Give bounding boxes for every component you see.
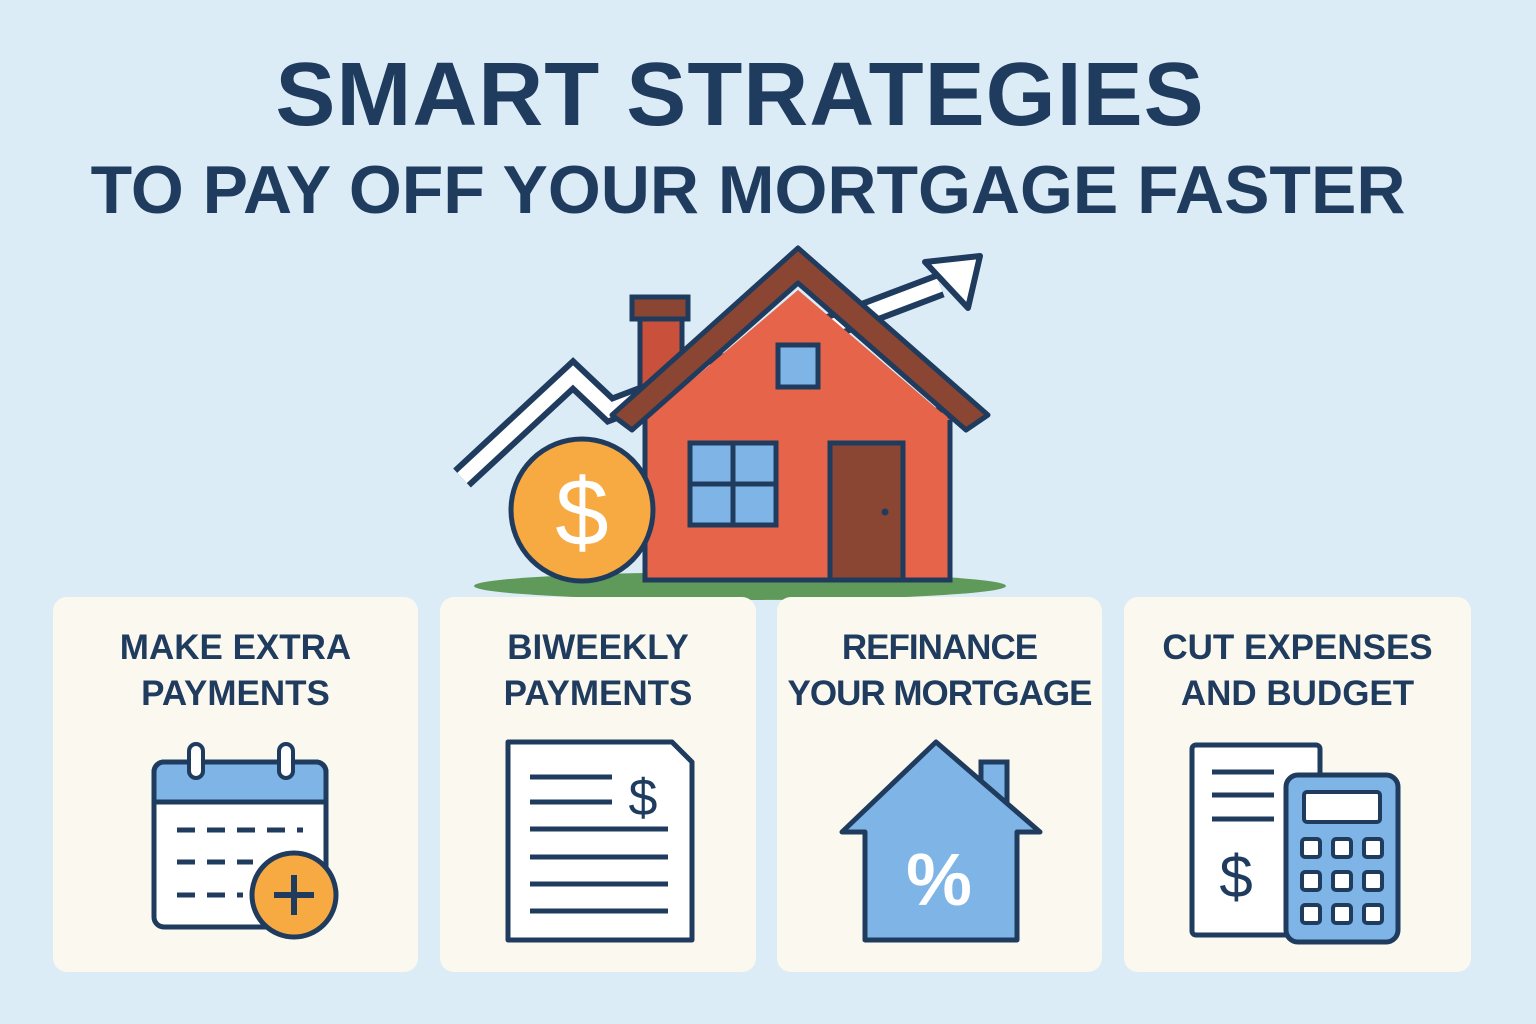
heading: REFINANCE (842, 628, 1037, 667)
icon: document with dollar: $ (629, 769, 658, 827)
icon: document and calculator: $ (1219, 843, 1253, 910)
card: biweekly payments (440, 597, 756, 972)
door (830, 443, 903, 580)
coin (511, 439, 653, 581)
arrow (462, 285, 940, 478)
heading: BIWEEKLY (507, 628, 689, 667)
card: refinance your mortgage (777, 597, 1102, 972)
chimney (640, 318, 682, 398)
house body (645, 410, 950, 580)
heading: AND BUDGET (1181, 674, 1414, 713)
heading (788, 628, 1092, 713)
heading: CUT EXPENSES (1162, 628, 1433, 667)
card: cut expenses and budget (1124, 597, 1471, 972)
roof (612, 248, 988, 430)
hero illustration: house with arrow and coin: $ (555, 459, 609, 566)
icon: document with dollar (506, 740, 694, 942)
icon: house with percent: % (906, 838, 972, 921)
subtitle: TO PAY OFF YOUR MORTGAGE FASTER (91, 152, 1405, 228)
icon: house with percent (840, 739, 1042, 942)
heading: PAYMENTS (141, 674, 330, 713)
heading: YOUR MORTGAGE (788, 674, 1091, 713)
heading (504, 628, 692, 713)
icon: calendar plus (152, 742, 338, 940)
card: make extra payments (53, 597, 418, 972)
ground (474, 572, 1006, 600)
attic window (778, 345, 818, 387)
title: SMART STRATEGIES (275, 45, 1205, 145)
window (690, 443, 776, 525)
heading (1162, 628, 1433, 713)
heading: MAKE EXTRA (120, 628, 351, 667)
icon: document and calculator (1190, 742, 1400, 944)
heading: PAYMENTS (504, 674, 692, 713)
heading (120, 628, 351, 713)
hero illustration: house with arrow and coin (453, 245, 1006, 600)
